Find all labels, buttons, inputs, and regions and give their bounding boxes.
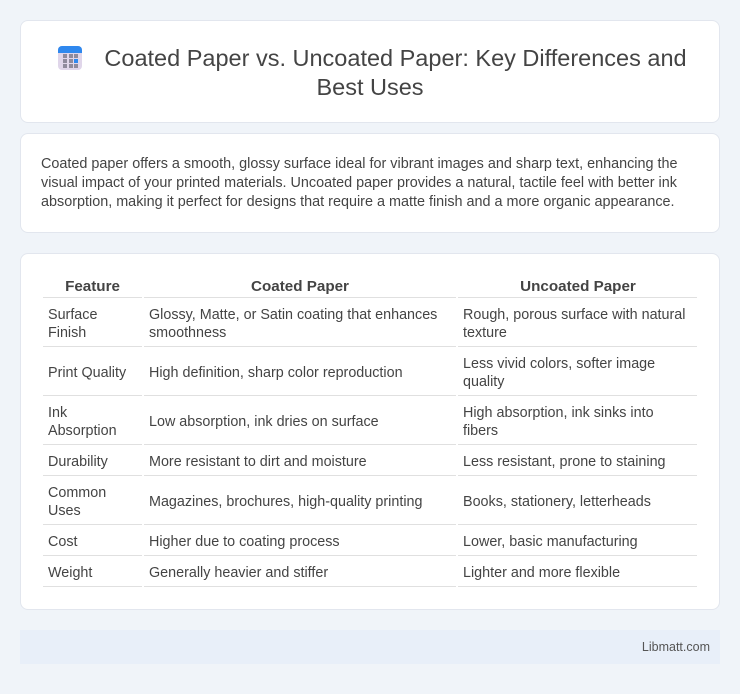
row: print quality: quality <box>463 374 504 390</box>
row: weight: Generally heavier and stiffer <box>149 565 328 581</box>
row: durability <box>48 454 666 470</box>
footer text: Libmatt.com <box>642 640 710 654</box>
footer bar <box>20 630 720 664</box>
row: surface finish: texture <box>463 325 507 341</box>
intro text: visual impact of your printed materials. Uncoated paper provides a natural, tactile feel with better ink <box>41 175 677 191</box>
row: weight <box>48 565 620 581</box>
title: Best Uses <box>316 74 424 100</box>
row: common uses: Magazines, brochures, high-quality printing <box>149 494 422 510</box>
intro text: Coated paper offers a smooth, glossy surface ideal for vibrant images and sharp text, enhancing the <box>41 156 678 172</box>
intro text: absorption, making it perfect for designs that require a matte finish and a more organic appearance. <box>41 194 675 210</box>
row: print quality: Less vivid colors, softer image <box>463 356 655 372</box>
table header: feature: Feature <box>65 278 120 295</box>
row: cost: Lower, basic manufacturing <box>463 534 638 550</box>
panel: comparison table <box>20 253 720 610</box>
row: common uses: Uses <box>48 503 81 519</box>
title: Coated Paper vs. Uncoated Paper: Key Differences and <box>104 45 687 71</box>
row: surface finish: Glossy, Matte, or Satin coating that enhances <box>149 307 437 323</box>
row: surface finish: Finish <box>48 325 86 341</box>
row: cost: Cost <box>48 534 78 550</box>
row: durability: More resistant to dirt and moisture <box>149 454 367 470</box>
row: ink absorption <box>48 405 654 439</box>
row: surface finish: Surface <box>48 307 97 323</box>
row: cost: Higher due to coating process <box>149 534 340 550</box>
row: print quality <box>48 356 655 390</box>
row: common uses <box>48 485 651 519</box>
row: surface finish <box>48 307 685 341</box>
row: weight: Weight <box>48 565 92 581</box>
table header: uncoated paper: Uncoated Paper <box>520 278 636 295</box>
row: ink absorption: Low absorption, ink dries on surface <box>149 414 379 430</box>
row: surface finish: smoothness <box>149 325 226 341</box>
title <box>104 45 687 100</box>
panel: introduction <box>20 133 720 233</box>
row: surface finish: Rough, porous surface with natural <box>463 307 685 323</box>
row: cost <box>48 534 638 550</box>
row: ink absorption: High absorption, ink sinks into <box>463 405 654 421</box>
row: print quality: Print Quality <box>48 365 126 381</box>
row: durability: Less resistant, prone to staining <box>463 454 666 470</box>
row: durability: Durability <box>48 454 108 470</box>
row: common uses: Books, stationery, letterheads <box>463 494 651 510</box>
row: print quality: High definition, sharp color reproduction <box>149 365 403 381</box>
panel: title card <box>20 20 720 123</box>
intro text <box>41 156 678 210</box>
row: weight: Lighter and more flexible <box>463 565 620 581</box>
table header: coated paper: Coated Paper <box>251 278 349 295</box>
row: common uses: Common <box>48 485 106 501</box>
icon: calendar <box>58 46 82 70</box>
row: ink absorption: Absorption <box>48 423 117 439</box>
row: ink absorption: fibers <box>463 423 498 439</box>
row: ink absorption: Ink <box>48 405 67 421</box>
